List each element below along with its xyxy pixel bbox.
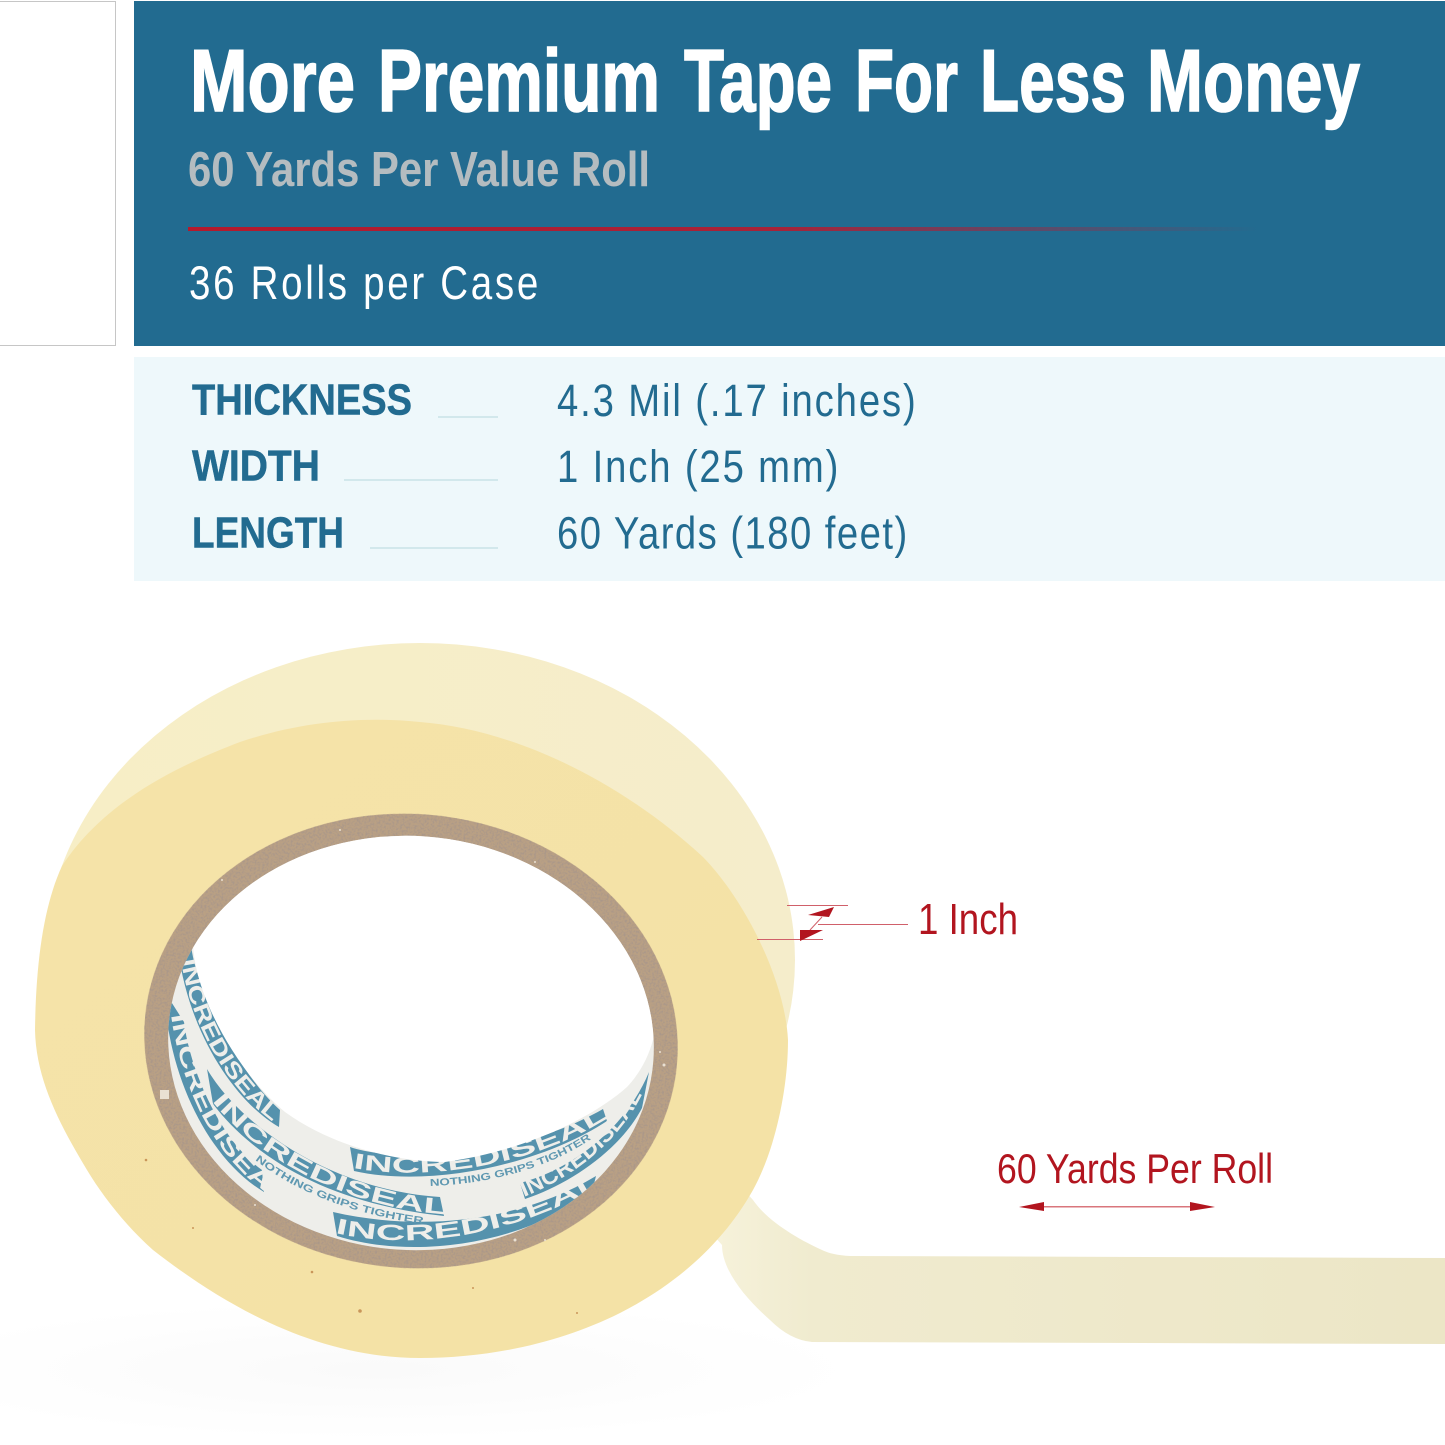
double arrow [1019, 1202, 1215, 1211]
roll side surface [45, 643, 795, 1277]
brand text [171, 960, 642, 1240]
length row: LENGTH [192, 508, 344, 558]
header panel [134, 1, 1445, 346]
brand text: INCREDISEAL [214, 1094, 444, 1214]
thickness row: THICKNESS [192, 376, 412, 424]
brand tagline: NOTHING GRIPS TIGHTER [256, 1155, 423, 1224]
width row: 1 Inch (25 mm) [557, 441, 838, 492]
brand text: INCREDISEAL [355, 1116, 606, 1173]
title: Premium [378, 31, 660, 130]
see-through hole [193, 836, 654, 1162]
brand tagline: NOTHING GRIPS TIGHTER [430, 1134, 591, 1186]
brand text: INCREDISEAL [338, 1183, 587, 1240]
inner liner with printed branding [168, 836, 654, 1250]
face specks [145, 1159, 578, 1314]
sixty yards dimension callout [997, 1145, 1273, 1211]
brand tagline [256, 1134, 591, 1224]
title: For [855, 31, 958, 130]
tape roll [35, 643, 795, 1358]
tape strip [700, 1180, 1445, 1344]
core specks [160, 829, 666, 1242]
one inch dimension callout [757, 895, 1018, 944]
one inch label: 1 Inch [918, 895, 1018, 944]
thickness row: 4.3 Mil (.17 inches) [557, 375, 916, 426]
case count: 36 Rolls per Case [189, 257, 538, 310]
blue ribbons [165, 945, 649, 1247]
length row [192, 508, 907, 558]
title: More [190, 31, 355, 130]
length row: 60 Yards (180 feet) [557, 508, 907, 558]
cardboard core [125, 792, 697, 1290]
brand text: INCREDISEAL [520, 1094, 642, 1196]
floor shadow [0, 1300, 860, 1440]
title: Less [980, 31, 1126, 130]
brand text: INCREDISEAL [182, 960, 274, 1122]
sixty yards dimension callout: 60 Yards Per Roll [997, 1145, 1273, 1192]
title [190, 31, 1360, 130]
subtitle: 60 Yards Per Value Roll [188, 143, 650, 197]
width row [192, 441, 838, 492]
left blank box [0, 2, 116, 346]
specifications panel [134, 357, 1445, 581]
thickness row [192, 375, 916, 426]
title: Tape [684, 31, 832, 130]
width row: WIDTH [192, 442, 320, 490]
title: Money [1147, 31, 1360, 130]
roll front face [35, 720, 788, 1358]
